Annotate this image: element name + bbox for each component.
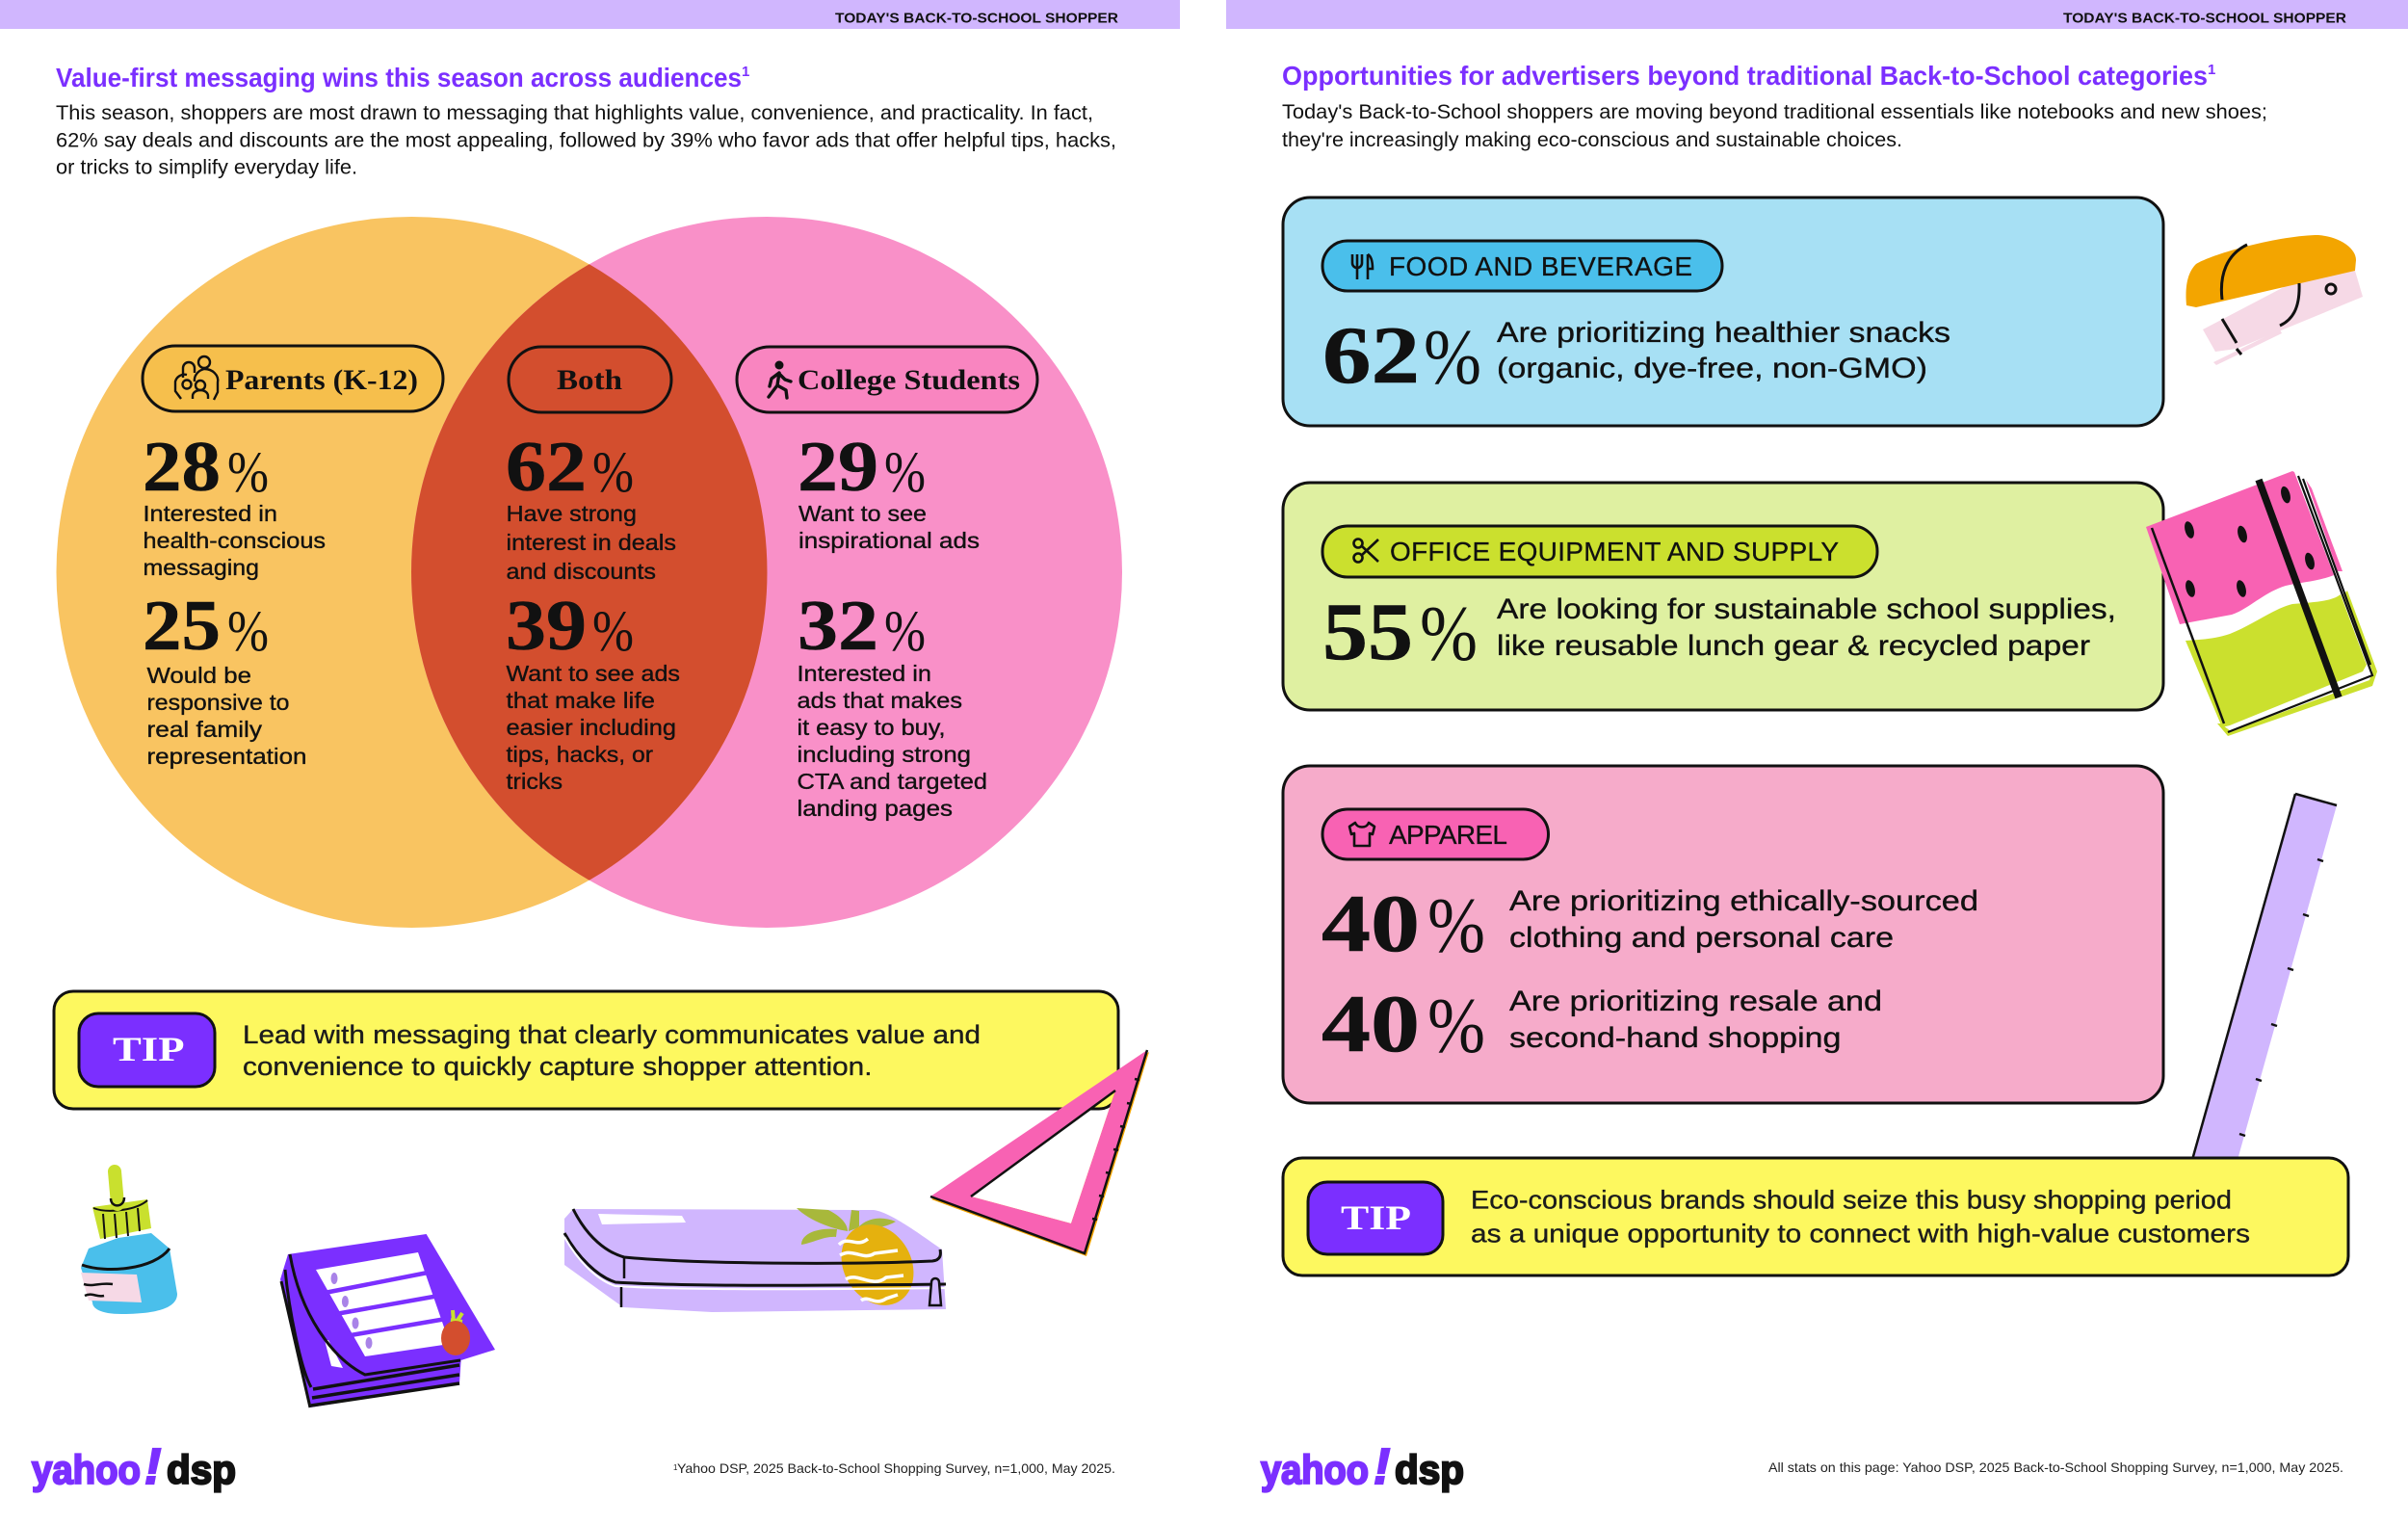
right page header band: TODAY'S BACK-TO-SCHOOL SHOPPER [2063,10,2346,27]
left intro paragraph: This season, shoppers are most drawn to messaging that highlights value, convenience, and practicality. In fact, [56,102,1093,124]
venn diagram [56,217,1122,928]
stat: 40 percent resale [1322,979,1882,1069]
stat: 40 percent resale: % [1427,982,1485,1069]
category pill: food and beverage: FOOD AND BEVERAGE [1389,251,1692,281]
left title: 1 [742,64,749,80]
stat: 55 percent sustainable supplies: 55 [1322,587,1413,677]
left footnote: 1 [673,1463,678,1472]
stat: both 62%: Have strong [507,501,637,526]
venn overlap: both [411,264,767,881]
stat: parents 28%: Interested in [143,501,277,526]
stat: college 32%: ads that makes [798,688,962,713]
right title: 1 [2208,62,2215,78]
stat: parents 25%: representation [146,744,306,769]
left tip callout [54,991,1118,1109]
stat: college 29%: % [884,440,926,504]
stat: 55 percent sustainable supplies [1322,587,2116,677]
left logo: yahoo dsp: ! [144,1439,161,1495]
stat: both 39% [506,587,680,794]
left logo: yahoo dsp [32,1439,236,1495]
stat: college 32%: 32 [798,587,878,666]
icon: scissors [1354,539,1378,563]
tip text [243,1020,981,1081]
stat: college 32%: including strong [798,742,971,767]
right tip callout [1283,1158,2348,1275]
panel: apparel [1283,766,2163,1103]
right footnote: All stats on this page: Yahoo DSP, 2025 Back-to-School Shopping Survey, n=1,000, May 2025. [1768,1459,2343,1475]
stat: college 32%: Interested in [798,661,931,686]
stat: college 32%: CTA and targeted [798,769,987,794]
icon: shirt [1349,823,1374,846]
stat: both 39%: easier including [507,715,676,740]
stat: both 39%: that make life [507,688,655,713]
left logo: yahoo dsp: yahoo [32,1447,141,1492]
stat: 62 percent healthier snacks [1322,310,1950,401]
left footnote: Yahoo DSP, 2025 Back-to-School Shopping Survey, n=1,000, May 2025. [677,1460,1115,1476]
icon: walking student [769,360,791,398]
stat: 62 percent healthier snacks: 62 [1322,310,1420,401]
stat: parents 25%: responsive to [146,690,289,715]
category pill: apparel: APPAREL [1389,820,1507,850]
category pill: office equipment: OFFICE EQUIPMENT AND SUPPLY [1390,537,1839,566]
stat: both 39%: Want to see ads [507,661,680,686]
category pill: food and beverage [1322,241,1722,291]
stat: college 32% [798,587,987,821]
tip badge: TIP [113,1030,185,1068]
stat: both 39%: tips, hacks, or [507,742,653,767]
stat: parents 25% [143,587,306,769]
tip text: Eco-conscious brands should seize this busy shopping period [1471,1185,2232,1214]
left intro paragraph: 62% say deals and discounts are the most appealing, followed by 39% who favor ads that offer helpful tips, hacks, [56,129,1116,152]
icon: watermelon notebook [2146,471,2377,736]
right intro paragraph [1282,101,2267,151]
stat: college 29%: 29 [798,428,878,507]
icon: family [175,356,218,400]
stat: 55 percent sustainable supplies: like reusable lunch gear & recycled paper [1497,630,2090,662]
right logo: yahoo dsp: ! [1374,1439,1390,1495]
tip text: convenience to quickly capture shopper attention. [243,1052,872,1081]
stat: parents 25%: 25 [143,587,221,666]
venn circle: college students [411,217,1122,928]
tip badge [79,1013,215,1087]
tip text: Lead with messaging that clearly communicates value and [243,1020,981,1049]
tip text [1471,1185,2250,1249]
left logo: yahoo dsp: dsp [167,1447,236,1492]
right title: Opportunities for advertisers beyond traditional Back-to-School categories [1282,61,2208,91]
right intro paragraph: Today's Back-to-School shoppers are moving beyond traditional essentials like notebooks and new shoes; [1282,101,2267,123]
stat: 62 percent healthier snacks: Are prioritizing healthier snacks [1497,317,1950,349]
stat: college 29%: inspirational ads [798,528,980,553]
stat: 62 percent healthier snacks: (organic, dye-free, non-GMO) [1497,353,1927,384]
left title: Value-first messaging wins this season across audiences [56,63,742,92]
panel: food and beverage [1283,197,2163,426]
left intro paragraph [56,102,1116,179]
stat: both 39%: tricks [507,769,563,794]
icon: notepad [280,1234,495,1407]
stat: both 62%: % [592,440,634,504]
tip text: as a unique opportunity to connect with high-value customers [1471,1220,2250,1249]
right logo: yahoo dsp [1261,1439,1464,1495]
left page header band [0,0,1180,29]
stat: 40 percent ethically-sourced: % [1427,881,1485,969]
category pill: office equipment [1322,526,1877,577]
stat: parents 28% [143,428,326,580]
pill: parents: Parents (K-12) [225,364,418,396]
stat: parents 28%: messaging [143,555,259,580]
icon: stapler [2186,235,2363,365]
stat: 55 percent sustainable supplies: Are looking for sustainable school supplies, [1497,593,2116,625]
stat: 62 percent healthier snacks: % [1424,313,1481,401]
pill: college students: College Students [798,364,1020,396]
stat: college 32%: it easy to buy, [798,715,946,740]
stat: 40 percent resale: 40 [1322,979,1420,1069]
stat: 40 percent ethically-sourced: 40 [1322,879,1420,969]
tip badge [1308,1182,1443,1254]
left page header band: TODAY'S BACK-TO-SCHOOL SHOPPER [835,10,1118,27]
stat: 40 percent resale: second-hand shopping [1509,1022,1842,1054]
stat: college 32%: % [884,599,926,663]
category pill: apparel [1322,809,1549,859]
stat: parents 25%: % [227,599,269,663]
right logo: yahoo dsp: dsp [1395,1447,1464,1492]
tip badge: TIP [1341,1198,1411,1237]
stat: parents 28%: health-conscious [143,528,326,553]
pill: college students [737,347,1037,412]
stat: both 62%: and discounts [507,559,656,584]
stat: both 62%: interest in deals [507,530,676,555]
stat: parents 25%: Would be [146,663,251,688]
stat: both 39%: % [592,599,634,663]
stat: college 29% [798,428,980,553]
icon: ruler [2192,794,2337,1160]
stat: college 32%: landing pages [798,796,953,821]
icon: pencil case with pineapple [564,1208,946,1319]
stat: parents 28%: % [227,440,269,504]
icon: ink bottle [81,1171,177,1314]
left intro paragraph: or tricks to simplify everyday life. [56,156,357,179]
right logo: yahoo dsp: yahoo [1261,1447,1369,1492]
stat: parents 28%: 28 [143,428,221,507]
panel: office equipment and supply [1283,483,2163,710]
pill: both [509,347,671,412]
stat: 40 percent ethically-sourced: clothing and personal care [1509,922,1894,954]
stat: college 29%: Want to see [798,501,927,526]
icon: triangle ruler [930,1050,1149,1256]
pill: both: Both [557,364,622,396]
right page header band [1226,0,2408,29]
stat: 55 percent sustainable supplies: % [1420,590,1478,677]
stat: both 39%: 39 [506,587,587,666]
stat: both 62%: 62 [506,428,587,507]
stat: 40 percent ethically-sourced [1322,879,1978,969]
stat: parents 25%: real family [146,717,263,742]
icon: fork and knife [1352,254,1373,279]
pill: parents [143,346,443,411]
stat: 40 percent ethically-sourced: Are prioritizing ethically-sourced [1509,885,1978,917]
venn circle: parents [56,217,767,928]
stat: 40 percent resale: Are prioritizing resale and [1509,986,1882,1017]
stat: both 62% [506,428,676,584]
right intro paragraph: they're increasingly making eco-conscious and sustainable choices. [1282,129,1902,151]
